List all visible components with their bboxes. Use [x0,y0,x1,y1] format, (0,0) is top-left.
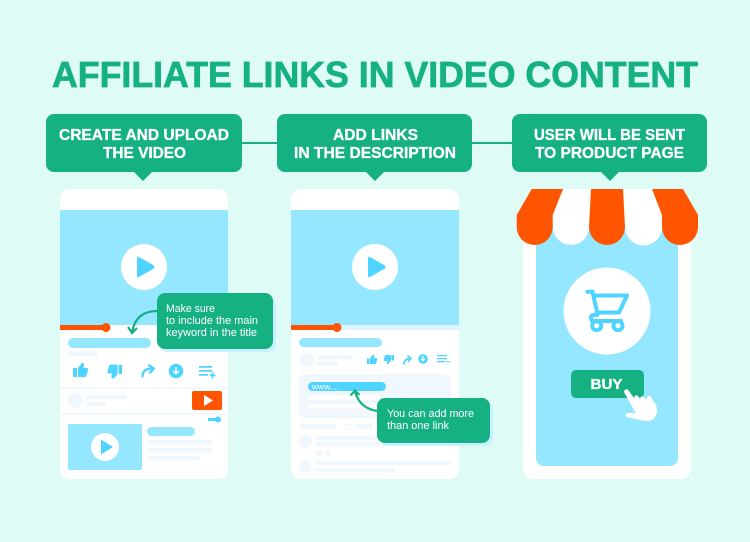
callout: keyword tip: to include the main [166,315,258,327]
callout: keyword tip: keyword in the title [166,327,257,339]
arrow: to link [350,390,377,411]
autoplay toggle [208,416,221,422]
progress bar [60,323,110,332]
step 2 heading [277,114,472,181]
description box [299,374,451,418]
step 2 heading: IN THE DESCRIPTION [294,145,456,162]
channel row [299,352,353,368]
awning [517,189,698,246]
title: AFFILIATE LINKS IN VIDEO CONTENT [52,54,698,95]
panel: store phone [517,189,698,479]
cart icon [564,268,650,354]
arrow: to title [128,311,157,333]
step 1 heading: THE VIDEO [103,145,186,162]
video player [291,210,459,330]
callout: more than one link [377,398,493,446]
progress bar [291,323,342,332]
step 2 heading: ADD LINKS [333,127,418,144]
channel row [60,387,228,415]
panel: description page phone [291,189,459,479]
step 3 heading [512,114,707,181]
video player [60,210,228,325]
video title placeholder [299,338,382,347]
comments section [299,424,451,473]
buy button [571,370,644,398]
step 1 heading [46,114,242,181]
panel: video page phone [60,189,228,479]
affiliate link [308,382,386,392]
callout: keyword tip [157,293,276,352]
action icons [73,363,216,379]
video title placeholder [68,338,151,356]
callout: more than one link: You can add more [387,408,474,420]
buy button: BUY [590,376,622,393]
callout: more than one link: than one link [387,420,449,432]
callout: keyword tip: Make sure [166,303,215,315]
step 3 heading: TO PRODUCT PAGE [535,145,684,162]
affiliate link: www.... [311,382,339,392]
connectors between steps [240,142,514,144]
subscribe button [192,391,222,410]
action icons [367,354,450,364]
step 1 heading: CREATE AND UPLOAD [59,127,229,144]
related video [68,424,212,470]
icon: pointing hand [624,389,657,421]
step 3 heading: USER WILL BE SENT [534,127,686,144]
